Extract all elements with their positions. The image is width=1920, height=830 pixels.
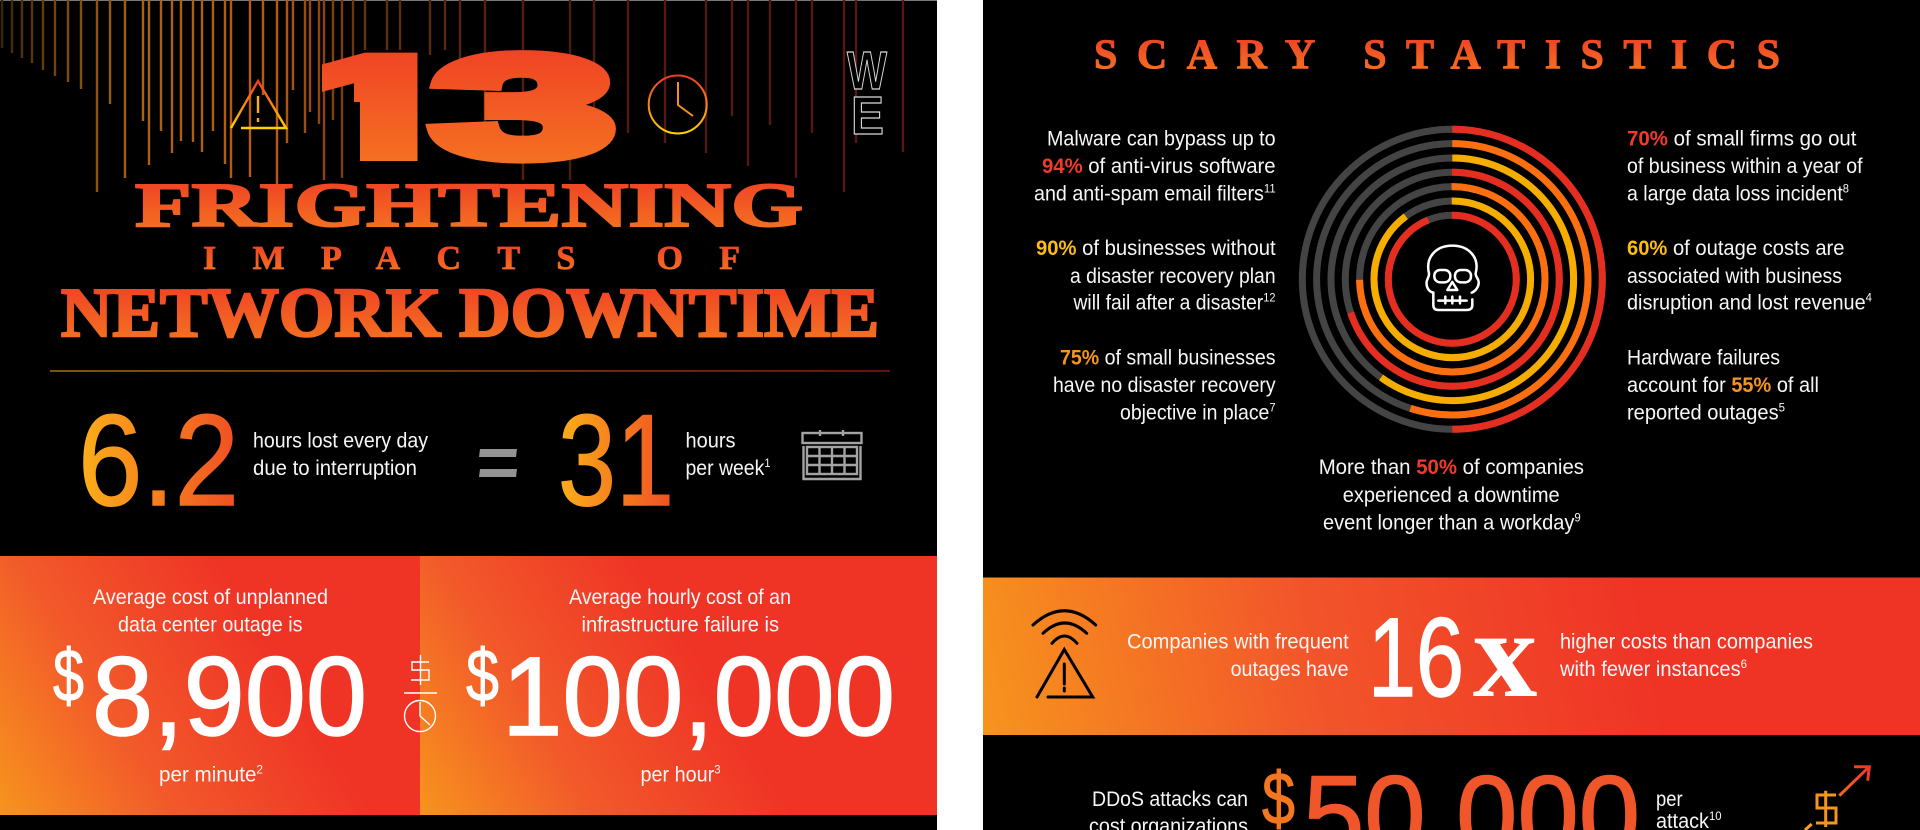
- text: outage costs: 60% of outage costs are: [1627, 237, 1844, 260]
- panel: 16x band: [983, 578, 1920, 735]
- text: small firms: of business within a year of: [1627, 155, 1863, 178]
- panel: 16x band: x: [1473, 586, 1538, 724]
- heading: scary statistics: SCARY STATISTICS: [1094, 32, 1780, 78]
- stat: 6.2 hours: due to interruption: [253, 457, 417, 480]
- panel: 16x band: 6: [1741, 657, 1747, 671]
- text: hardware failures: [1627, 347, 1819, 425]
- panel: cost per minute: 2: [256, 763, 263, 777]
- panel: cost per minute: Average cost of unplanned: [93, 586, 328, 609]
- text: recovery plan: [1036, 237, 1276, 315]
- title divider: [50, 370, 890, 372]
- panel: cost per hour: 100,000: [502, 634, 895, 759]
- text: recovery plan: 12: [1263, 291, 1276, 305]
- panel: left black panel: [0, 0, 937, 830]
- text: outage costs: associated with business: [1627, 265, 1842, 288]
- text: outage costs: disruption and lost revenue: [1627, 292, 1879, 315]
- text: workday downtime: [1319, 456, 1584, 534]
- icon: clock: [649, 76, 707, 134]
- text: malware: Malware can bypass up to: [1047, 128, 1276, 151]
- equals sign: [479, 449, 517, 477]
- stat: 6.2 hours: 6.2: [78, 387, 239, 533]
- icon: rising dollar arrow: [1805, 767, 1869, 830]
- stat: DDoS cost: [1089, 753, 1722, 830]
- panel: cost per hour: 3: [714, 763, 721, 777]
- text: malware: [1034, 128, 1276, 205]
- text: outage costs: 4: [1866, 291, 1872, 305]
- logo: WE: [847, 41, 887, 146]
- icon: dollar over clock: [404, 655, 437, 732]
- stat: 31 hours: per week: [686, 457, 771, 480]
- title number 13: 3: [433, 28, 614, 187]
- title: IMPACTS OF: IMPACTS OF: [203, 240, 740, 277]
- panel: 16x band: higher costs than companies: [1560, 630, 1813, 653]
- icon: wifi warning: [1033, 611, 1096, 697]
- stat: 31 hours: 1: [764, 456, 771, 470]
- stat: 31 hours: hours: [686, 430, 736, 453]
- text: malware: 11: [1264, 181, 1276, 195]
- text: recovery plan: a disaster recovery plan: [1070, 265, 1276, 288]
- panel: cost per minute: [0, 556, 420, 815]
- text: recovery objective: 75% of small businesses: [1060, 347, 1276, 370]
- text: hardware failures: account for 55% of all: [1627, 374, 1819, 397]
- title: FRIGHTENING: FRIGHTENING: [135, 172, 803, 240]
- text: recovery objective: 7: [1269, 401, 1276, 415]
- stat: 31 hours: 31: [558, 387, 674, 533]
- title: NETWORK DOWNTIME: NETWORK DOWNTIME: [61, 275, 879, 352]
- logo: WE: W: [847, 41, 887, 101]
- text: small firms: a large data loss incident: [1627, 182, 1859, 205]
- text: recovery objective: [1053, 347, 1276, 425]
- panel: right black panel: [983, 0, 1920, 830]
- panel: cost per minute: per minute: [159, 764, 258, 787]
- panel: 16x band: Companies with frequent: [1127, 630, 1349, 653]
- panel: cost per minute: $: [53, 634, 84, 717]
- stat: 31 hours: [558, 387, 771, 533]
- text: malware: and anti-spam email filters: [1034, 182, 1279, 205]
- text: workday downtime: experienced a downtime: [1343, 484, 1560, 507]
- panel: cost per hour: [420, 556, 937, 815]
- panel: cost per hour: infrastructure failure is: [582, 614, 779, 637]
- panel: cost per hour: per hour: [640, 764, 719, 787]
- stat: DDoS cost: per: [1656, 788, 1683, 811]
- title number 13: [322, 50, 616, 164]
- text: recovery objective: have no disaster recovery: [1053, 374, 1276, 397]
- text: small firms: 70% of small firms go out: [1627, 128, 1857, 151]
- text: malware: 94% of anti-virus software: [1042, 155, 1276, 178]
- icon: calendar: [802, 430, 862, 479]
- panel: cost per hour: Average hourly cost of an: [569, 586, 791, 609]
- icon: skull: [1427, 246, 1479, 310]
- text: small firms: [1627, 128, 1863, 205]
- panel: cost per minute: data center outage is: [118, 614, 302, 637]
- text: recovery plan: 90% of businesses without: [1036, 237, 1276, 260]
- stat: DDoS cost: 10: [1709, 809, 1722, 823]
- text: hardware failures: reported outages: [1627, 402, 1786, 425]
- panel: 16x band: with fewer instances: [1560, 658, 1749, 681]
- text: workday downtime: 9: [1574, 510, 1581, 524]
- stat: DDoS cost: DDoS attacks can: [1092, 788, 1248, 811]
- logo: WE: E: [851, 86, 884, 146]
- text: hardware failures: Hardware failures: [1627, 347, 1780, 370]
- text: recovery plan: will fail after a disaster: [1074, 292, 1280, 315]
- text: workday downtime: More than 50% of companies: [1319, 456, 1584, 479]
- icon: warning triangle: [231, 81, 286, 128]
- text: outage costs: [1627, 237, 1872, 315]
- stat: 6.2 hours: hours lost every day: [253, 430, 428, 453]
- panel: 16x band: 16: [1368, 595, 1464, 720]
- panel: 16x band: outages have: [1231, 658, 1349, 681]
- panel: cost per minute: 8,900: [92, 634, 367, 759]
- stat: 6.2 hours: [78, 387, 428, 533]
- panel: cost per hour: $: [466, 634, 499, 717]
- text: hardware failures: 5: [1779, 401, 1785, 415]
- title number 13: 1: [288, 28, 473, 187]
- decorative dripping lines: [2, 0, 903, 192]
- donut rings chart: [1302, 129, 1602, 429]
- text: small firms: 8: [1843, 181, 1849, 195]
- text: workday downtime: event longer than a workday: [1323, 511, 1587, 534]
- text: recovery objective: objective in place: [1120, 402, 1281, 425]
